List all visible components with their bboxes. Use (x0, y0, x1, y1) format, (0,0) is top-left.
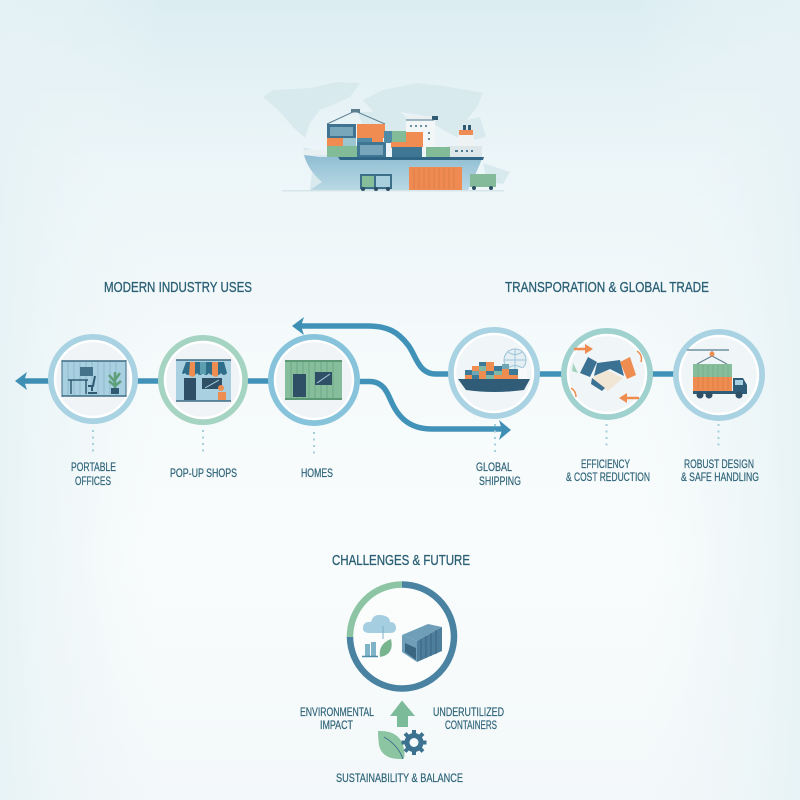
label: global shipping (476, 460, 521, 488)
node: efficiency and cost reduction (564, 331, 650, 417)
arrow: up (390, 700, 415, 727)
dotted leader (494, 424, 496, 455)
hero illustration: cargo ship with world map (263, 82, 510, 192)
orange container (409, 167, 462, 190)
node: portable offices (51, 337, 135, 421)
dotted leader (313, 432, 315, 457)
left wagon (360, 174, 392, 189)
label: portable offices: PORTABLE (71, 460, 116, 474)
icon: leaf (378, 731, 404, 759)
label: robust design and safe handling: ROBUST DESIGN (684, 457, 754, 471)
icon: open container (402, 624, 442, 662)
label: portable offices: OFFICES (75, 474, 111, 488)
crane cable (327, 111, 385, 124)
superstructure (406, 119, 435, 151)
node: global shipping (451, 330, 537, 416)
containers (327, 124, 356, 138)
icon: cloud, factory and leaf (362, 615, 396, 657)
label: robust design and safe handling (681, 457, 759, 484)
dotted leader (718, 424, 720, 450)
node: pop-up shops (161, 338, 245, 422)
heading: challenges and future: CHALLENGES & FUTURE (332, 553, 470, 569)
label: efficiency and cost reduction (566, 457, 650, 484)
label: portable offices (71, 460, 116, 488)
dotted leader (202, 430, 204, 456)
label: pop-up shops: POP-UP SHOPS (170, 466, 237, 480)
label: environmental impact (300, 705, 374, 732)
node: robust design and safe handling (676, 332, 762, 418)
label: global shipping: SHIPPING (479, 474, 521, 488)
heading: transportation and global trade: TRANSPORATION & GLOBAL TRADE (505, 280, 709, 296)
ring: challenges (350, 584, 454, 688)
label: underutilized containers: UNDERUTILIZED (433, 705, 504, 719)
label: underutilized containers (433, 705, 504, 732)
dock line (282, 190, 504, 192)
label: underutilized containers: CONTAINERS (445, 718, 497, 732)
arrow heads (15, 317, 511, 440)
hull (303, 150, 327, 155)
arrow: lower S curve (358, 382, 503, 429)
dotted leader (606, 424, 608, 450)
icon: gear (402, 730, 426, 755)
arrow: to far left (24, 378, 50, 384)
label: efficiency and cost reduction: & COST REDUCTION (566, 470, 650, 484)
label: environmental impact: ENVIRONMENTAL (300, 705, 374, 719)
label: robust design and safe handling: & SAFE HANDLING (681, 470, 759, 484)
heading: modern industry uses: MODERN INDUSTRY USES (104, 280, 252, 296)
arrow: upper S curve (298, 326, 453, 374)
node: homes (271, 337, 357, 423)
label: environmental impact: IMPACT (320, 718, 353, 732)
connector lines and arrows (24, 326, 680, 429)
handshake (593, 370, 623, 391)
label: homes: HOMES (301, 466, 333, 480)
right wagon (470, 174, 496, 187)
dotted leader (92, 430, 94, 456)
label: global shipping: GLOBAL (476, 460, 512, 474)
label: sustainability and balance: SUSTAINABILITY & BALANCE (336, 771, 463, 785)
world map (263, 82, 510, 190)
label: efficiency and cost reduction: EFFICIENCY (581, 457, 630, 471)
